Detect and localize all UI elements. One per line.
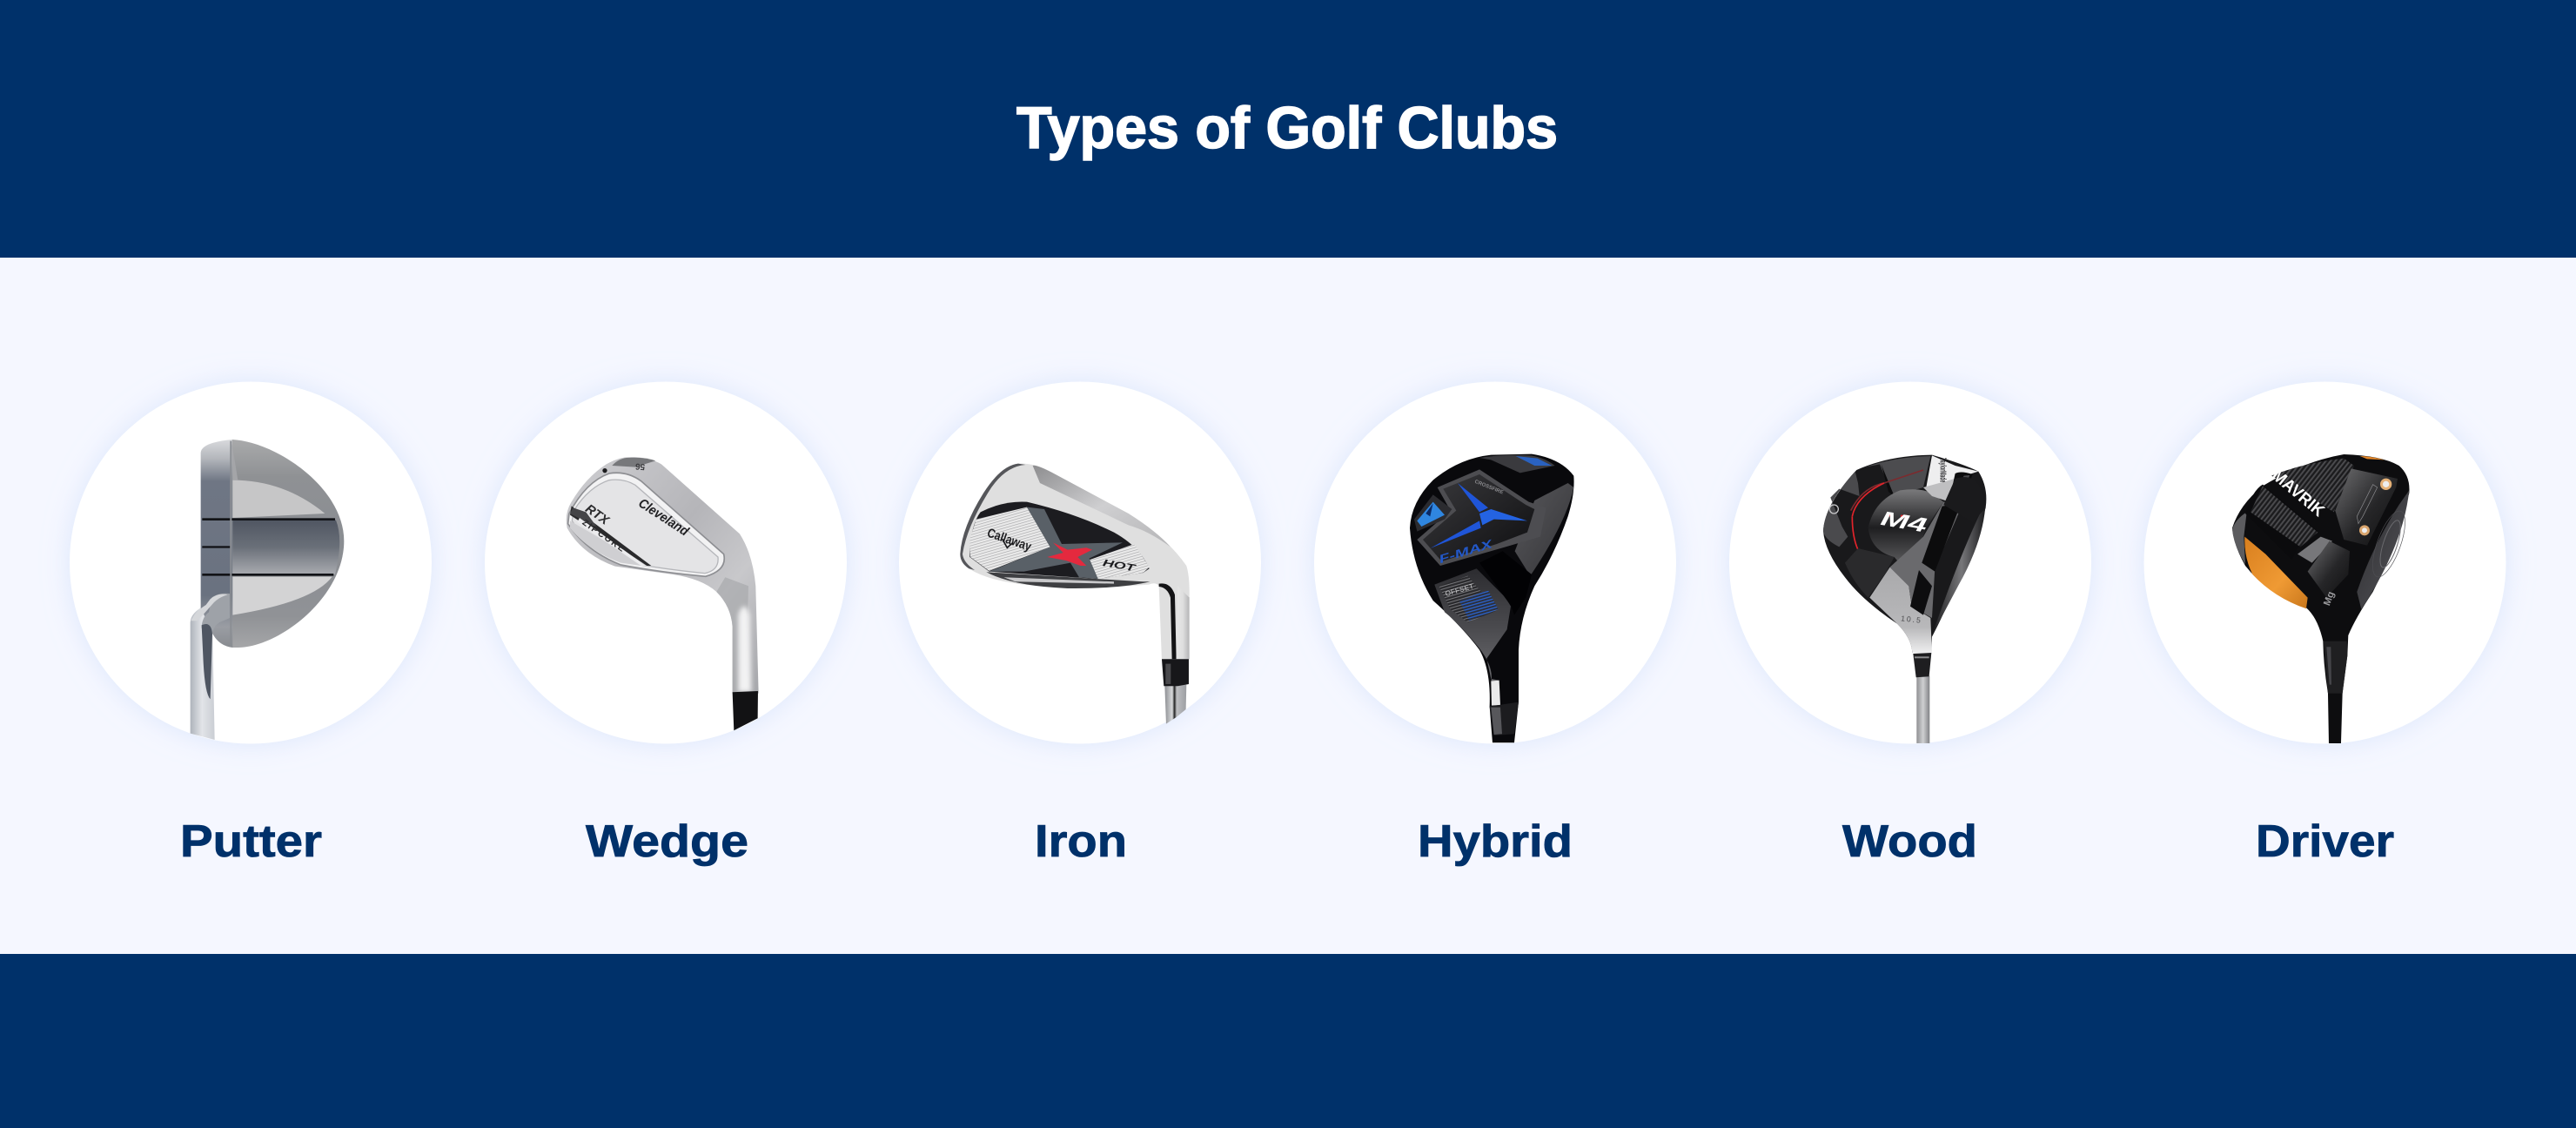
icon: driver club: Mg [2322, 590, 2337, 608]
icon: wedge club: Cleveland [635, 496, 692, 540]
title: Types of Golf Clubs [1016, 95, 1558, 161]
panel: iron [899, 381, 1261, 743]
panel: driver [2144, 381, 2506, 743]
label: Driver: Driver [2256, 816, 2394, 867]
label: Wood: Wood [1842, 816, 1977, 867]
icon: wood club [1823, 455, 1986, 743]
background panel [0, 258, 2576, 954]
label: Hybrid: Hybrid [1418, 816, 1573, 867]
icon: driver club: MAVRIK [2268, 467, 2328, 520]
icon: putter club [191, 440, 344, 740]
icon: wood club: 10.5 [1901, 614, 1922, 625]
icon: hybrid club: OFFSET [1445, 582, 1474, 598]
panel: putter [70, 381, 432, 743]
icon: wedge club: RTX [582, 502, 612, 528]
icon: wedge club: 56 [634, 461, 646, 471]
footer band [0, 954, 2576, 1128]
iron circle [899, 381, 1261, 743]
icon: iron club: Callaway [985, 527, 1034, 554]
panel: wood [1729, 381, 2091, 743]
label: Putter: Putter [180, 816, 322, 867]
icon: wood club: TaylorMade [1937, 458, 1947, 483]
icon: iron club: HOT [1102, 558, 1137, 574]
wedge circle [485, 381, 847, 743]
label: Iron: Iron [1035, 816, 1127, 867]
putter circle [70, 381, 432, 743]
panel: wedge [485, 381, 847, 743]
hybrid circle [1314, 381, 1676, 743]
icon: driver club [2232, 454, 2412, 743]
icon: wood club: M4 [1879, 507, 1929, 537]
icon: hybrid club: F-MAX [1437, 537, 1495, 566]
panel: hybrid [1314, 381, 1676, 743]
icon: hybrid club: CROSSFIRE [1473, 480, 1504, 495]
wood circle [1729, 381, 2091, 743]
icon: wedge club [567, 457, 759, 730]
label: Wedge: Wedge [586, 816, 748, 867]
icon: hybrid club [1410, 454, 1574, 742]
header band [0, 0, 2576, 258]
icon: iron club [960, 464, 1190, 724]
icon: wedge club: ZIPCORE [580, 518, 627, 554]
driver circle [2144, 381, 2506, 743]
